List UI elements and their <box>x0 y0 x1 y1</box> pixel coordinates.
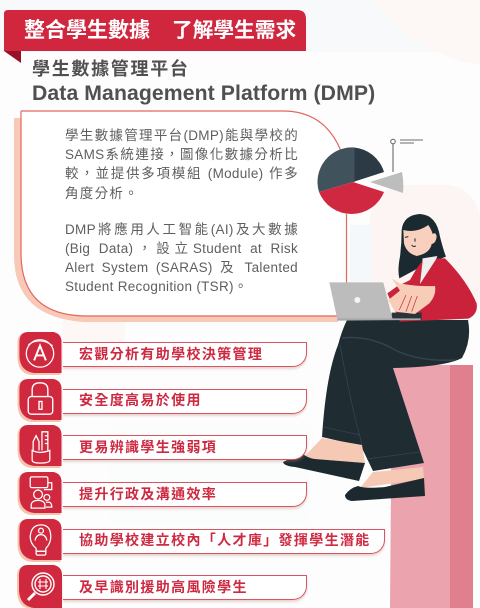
text block: description: DMP將應用人工智能(AI)及大數據 <box>65 222 298 237</box>
bar 1 <box>63 342 307 367</box>
face <box>403 225 437 256</box>
banner: main heading: 整合學生數據 <box>24 19 150 42</box>
trousers <box>322 320 469 471</box>
text block: description: (Big Data)，設立Student at Risk <box>65 241 298 256</box>
list item 6 <box>17 565 308 608</box>
text block: description: 較，並提供多項模組 (Module) 作多 <box>65 166 298 181</box>
heading: Chinese platform name: 學生數據管理平台 <box>32 59 190 79</box>
bar 6 <box>63 575 307 600</box>
icon: magnifier <box>17 565 62 608</box>
text block: description <box>65 128 298 294</box>
list item 1 <box>18 332 308 375</box>
label 1: 宏觀分析有助學校決策管理 <box>79 346 263 362</box>
label 5: 協助學校建立校內「人才庫」發揮學生潛能 <box>79 532 371 548</box>
label 4: 提升行政及溝通效率 <box>79 486 217 502</box>
jacket <box>387 258 477 322</box>
list item 2 <box>18 379 308 422</box>
bar 5 <box>63 529 385 554</box>
icon: grade A <box>18 332 62 375</box>
hand <box>388 278 435 314</box>
panel: description card outline <box>14 110 341 322</box>
bar 2 <box>63 389 307 414</box>
text block: description: Alert System (SARAS) 及 Talented <box>65 260 298 275</box>
label 2: 安全度高易於使用 <box>79 392 202 408</box>
icon: people and chat <box>18 472 62 515</box>
bar 4 <box>63 482 307 507</box>
text block: description: SAMS系統連接，圖像化數據分析比 <box>65 147 298 162</box>
eye and mouth <box>405 237 416 246</box>
banner: main heading <box>4 10 306 63</box>
label 6: 及早識別援助高風險學生 <box>79 579 248 595</box>
chart: pie chart <box>318 138 423 282</box>
illustration: woman with laptop <box>283 214 477 501</box>
laptop <box>329 282 422 321</box>
stool <box>390 365 473 608</box>
list item 3 <box>18 425 308 468</box>
label 3: 更易辨識學生強弱項 <box>79 439 217 455</box>
hair <box>398 214 446 278</box>
icon: pencil cup <box>18 425 62 468</box>
heading: English platform name: Data Management Platform (DMP) <box>32 82 375 105</box>
icon: lightbulb person <box>18 519 62 562</box>
text block: description: 角度分析。 <box>65 186 139 201</box>
feet and shoes <box>283 438 425 501</box>
text block: description: Student Recognition (TSR)。 <box>65 279 248 294</box>
list item 5 <box>18 519 386 562</box>
banner: main heading: 了解學生需求 <box>172 19 296 42</box>
icon: padlock <box>18 379 62 422</box>
text block: description: 學生數據管理平台(DMP)能與學校的 <box>65 128 298 143</box>
bar 3 <box>63 435 307 460</box>
list item 4 <box>18 472 308 515</box>
blouse <box>420 256 437 281</box>
